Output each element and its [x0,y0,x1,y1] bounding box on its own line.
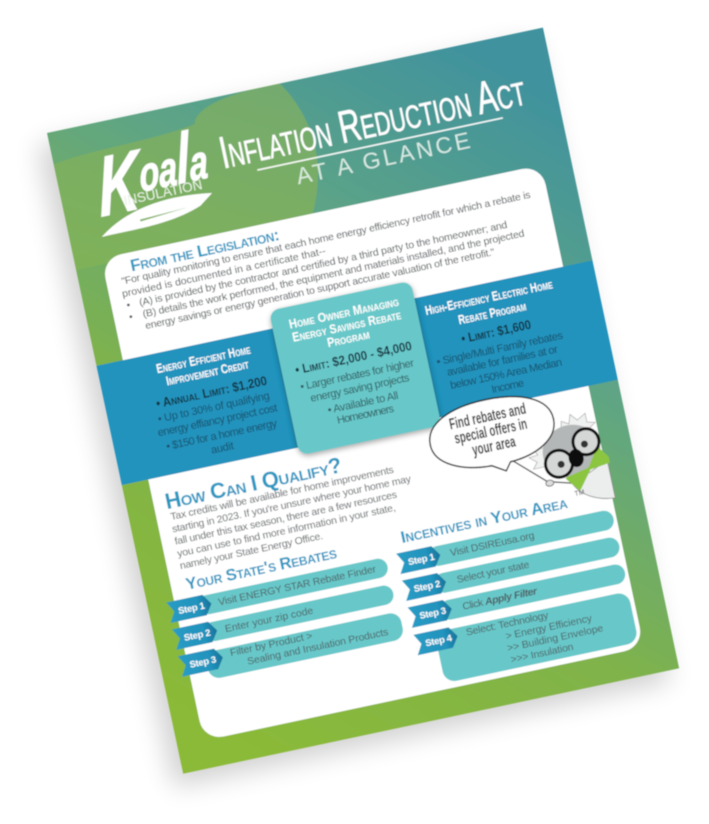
koala eye right [580,440,589,448]
step 1 label: Step 1 [407,552,436,568]
panel: energy efficient home improvement credit [143,340,284,467]
blue program band [96,260,618,485]
step 1 ribbon [166,593,214,623]
panel: high-efficiency electric home rebate program [424,277,573,406]
logo subtitle: INSULATION [122,176,204,208]
koala bow tie [565,448,610,491]
title underline [257,118,503,170]
panel: from the legislation [115,172,542,335]
logo: Koala Insulation [81,113,225,237]
step 2 text: Enter your zip code [224,605,315,635]
program title line 2: Energy Savings Rebate [291,308,403,345]
step 4 text line 3: >> Building Envelope [506,622,605,654]
step 4 label: Step 4 [424,633,454,649]
heading: how can I qualify: How Can I Qualify? [163,452,344,514]
bullet B: • [128,311,134,323]
panel: incentives in your area [391,484,640,688]
logo wordmark: K [95,133,142,235]
step 3 text: Click Apply Filter [461,585,539,613]
credit detail 1: • Up to 30% of qualifying [157,390,271,426]
rebate detail 1: • Single/Multi Family rebates [435,330,565,368]
step 3 ribbon [178,647,225,677]
limit: • Limit: $2,000 - $4,000 [294,339,413,377]
legislation item B continued: energy savings or energy generation to support accurate valuation of the retrofit." [144,246,496,332]
heading: your state's rebates: Your State's Rebates [184,544,339,594]
panel: your state's rebates [162,534,405,686]
background leaf blob [47,79,330,270]
card detail 1: • Larger rebates for higher [299,357,415,393]
step 2 label: Step 2 [183,628,212,644]
step 4 pill [434,591,639,683]
qualify text line 4: you can use to find more information in your state, [176,502,397,560]
program title line 2: Rebate Program [457,299,527,327]
center card [269,281,441,456]
trademark: TM [574,489,586,498]
koala pointer arm [513,460,572,484]
qualify text line 2: starting in 2023. If you're unsure where your home may [171,473,413,536]
heading: incentives in your area: Incentives in Your Area [399,493,569,547]
koala mascot [513,412,616,500]
bubble text line 1: Find rebates and [448,401,528,434]
qualify text line 3: fall under this tax season, there are a few resources [174,489,398,548]
step 3 pill [438,563,627,622]
koala eye left [557,460,565,468]
legislation item B: (B) details the work performed, the equipment and materials installed, and the projected [142,228,526,320]
koala glasses lens left [543,448,575,480]
bubble text line 3: your area [471,434,517,459]
heading: from the legislation: From the Legislation: [129,225,281,275]
white content panel [101,165,644,741]
rebate detail 3: below 150% Area Median [449,357,563,392]
subtitle: AT A GLANCE [294,127,472,189]
credit detail 4: audit [210,440,235,457]
step 2 pill [202,584,395,643]
credit detail 3: • $150 for a home energy [165,418,279,453]
step 1 pill [197,557,390,616]
step 2 ribbon [172,620,219,650]
koala ear right [560,412,596,428]
step 4 text line 4: >>> Insulation [509,641,575,666]
step 3 text line 1: Filter by Product > [229,630,314,659]
step 3 pill [204,611,405,680]
step 1 text: Visit ENERGY STAR Rebate Finder [217,563,378,608]
logo wordmark: a [188,134,209,192]
step 2 ribbon [402,572,448,601]
program title: Home Owner Managing [288,295,400,332]
rebate detail 4: Income [490,377,525,396]
legislation quote line 1: "For quality monitoring to ensure that each home energy efficiency retrofit for which a rebate is [120,189,532,288]
program title line 2: Improvement Credit [165,357,250,388]
speech bubble [423,387,562,485]
legislation quote line 2: provided is documented in a certificate that-- [121,245,327,300]
logo wordmark: oa [138,141,179,202]
bubble text line 2: special offers in [453,416,529,448]
step 4 ribbon [413,626,460,655]
step 3 ribbon [408,598,454,628]
bubble outline [423,387,562,485]
step 2 label: Step 2 [413,579,442,595]
qualify text line 5: namely your State Energy Office. [179,530,324,572]
step 3 text line 2: Sealing and Insulation Products [246,626,389,668]
rebate detail 2: available for families at or [446,344,559,379]
bullet A: • [125,299,132,312]
step 1 text: Visit DSIREusa.org [449,530,536,559]
koala glasses lens right [571,426,601,457]
center card shadow [269,283,442,457]
step 1 label: Step 1 [177,601,207,617]
step 2 text: Select your state [456,559,531,586]
step 3 label: Step 3 [189,654,217,671]
step 2 pill [432,536,621,595]
qualify text line 1: Tax credits will be available for home improvements [169,464,395,523]
step 3 label: Step 3 [419,606,447,622]
step 1 pill [427,509,616,568]
koala head [542,424,601,478]
koala hand [545,479,554,487]
logo leaf [97,190,216,237]
credit detail 2: energy effiancy project cost [157,402,278,439]
program title: Energy Efficient Home [155,343,252,376]
step 4 text line 1: Select: Technology [465,609,550,639]
annual limit: • Annual Limit: $1,200 [155,374,268,411]
logo wordmark: l [173,117,193,199]
card detail 4: Homeowners [336,403,396,427]
step 4 text line 2: > Energy Efficiency [504,612,594,642]
panel: how can I qualify [163,439,421,572]
limit: • Limit: $1,600 [460,318,532,346]
program title: High-Efficiency Electric Home [424,277,554,318]
step 1 ribbon [396,545,443,574]
title: Inflation Reduction Act [215,64,530,178]
koala body [572,462,616,500]
legislation item A: (A) is provided by the contractor and certified by a third party to the homeowner; and [138,219,509,309]
card detail 2: energy saving projects [309,372,411,405]
program title line 3: Program [326,328,371,350]
panel: home owner managing energy savings rebate program [269,281,441,456]
koala ear left [528,447,545,470]
card detail 3: • Available to All [327,390,400,417]
koala nose [568,448,584,468]
